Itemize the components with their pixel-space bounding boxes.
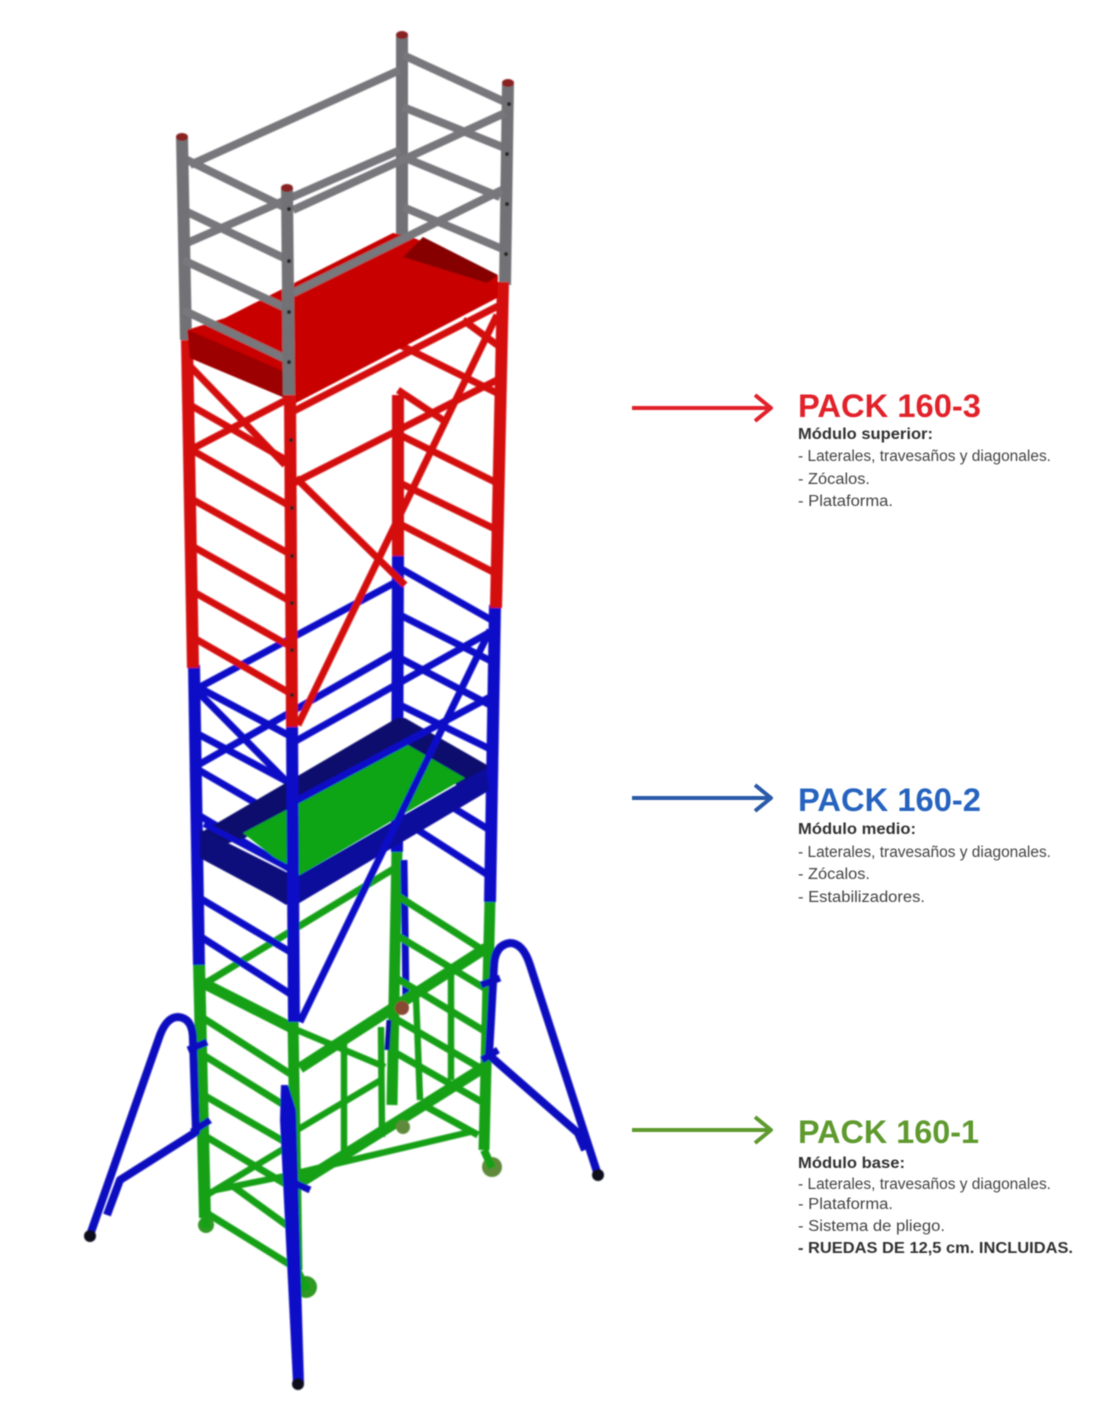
- red left rungs: [190, 405, 288, 692]
- green base module: [198, 850, 502, 1298]
- platform silhouette: [187, 233, 498, 404]
- blue back rails: [198, 581, 398, 765]
- green right post: [484, 900, 490, 1150]
- arrow: green: [632, 1117, 771, 1143]
- blue left post: [194, 665, 199, 965]
- description: [798, 426, 1051, 510]
- blue outrigger: right: [489, 943, 598, 1175]
- description: - Plataforma.: [798, 493, 893, 510]
- description: Módulo medio:: [798, 821, 916, 838]
- red X diagonals: [190, 366, 405, 585]
- heading: PACK 160-3: [798, 388, 981, 424]
- green floor: [243, 745, 465, 876]
- description: - Estabilizadores.: [798, 889, 925, 906]
- heading: PACK 160-1: [798, 1114, 979, 1150]
- green left post: [199, 962, 205, 1218]
- outrigger feet: [84, 1169, 604, 1390]
- red right face rungs: [398, 320, 500, 573]
- front left wall: [200, 829, 288, 905]
- arrow: red: [632, 395, 771, 421]
- wheels: [198, 1001, 502, 1298]
- green folding verticals: [297, 970, 451, 1153]
- callout: PACK 160-3: [632, 388, 1051, 510]
- blue outrigger: front: [280, 1085, 304, 1383]
- green front post: [293, 1020, 297, 1270]
- callout: PACK 160-2: [632, 782, 1051, 906]
- description: - Zócalos.: [798, 866, 870, 883]
- blue long diagonal: [300, 630, 490, 1022]
- green upper long rail: [204, 868, 395, 984]
- blue outrigger: left: [90, 1017, 196, 1235]
- red left post: [187, 340, 193, 668]
- description: - Sistema de pliego.: [798, 1218, 945, 1235]
- blue platform: [200, 718, 490, 905]
- blue back post: [397, 553, 398, 852]
- post caps: [176, 31, 514, 192]
- description: Módulo base:: [798, 1155, 905, 1172]
- front left wall: [188, 330, 285, 398]
- arrow: blue: [632, 785, 771, 811]
- blue front long rails: [294, 631, 492, 802]
- description: - Zócalos.: [798, 471, 870, 488]
- description: - Laterales, travesaños y diagonales.: [798, 844, 1051, 861]
- red right post: [496, 282, 503, 608]
- heading: PACK 160-2: [798, 782, 981, 818]
- description: - Laterales, travesaños y diagonales.: [798, 448, 1051, 465]
- blue right face rungs: [398, 567, 495, 875]
- blue brace behind green post: [404, 860, 406, 1000]
- green back post: [392, 850, 397, 1105]
- red long rails: [292, 305, 500, 484]
- front right wall: [296, 768, 490, 905]
- blue right post: [490, 605, 495, 902]
- green thick rails: [203, 948, 486, 1182]
- red platform: [187, 233, 498, 404]
- post holes: [289, 104, 509, 695]
- description: [798, 1155, 1073, 1257]
- back walls: [200, 718, 487, 845]
- green diagonals: [207, 1080, 470, 1195]
- scaffold tower illustration: [84, 31, 604, 1390]
- description: [798, 821, 1051, 906]
- blue left rungs: [196, 686, 292, 995]
- description: - Plataforma.: [798, 1196, 893, 1213]
- blue front post: [292, 725, 294, 1022]
- gray guardrail back: [182, 35, 508, 340]
- blue middle module: [194, 553, 495, 1022]
- red back post: [392, 395, 404, 556]
- back right wall: [403, 237, 498, 283]
- red front post: [290, 393, 292, 727]
- gray guardrail front: [176, 31, 514, 695]
- stabilizer clamps: [188, 978, 500, 1190]
- callout: PACK 160-1: [632, 1114, 1073, 1257]
- green left rungs: [200, 1016, 292, 1266]
- description: Módulo superior:: [798, 426, 933, 443]
- description: - Laterales, travesaños y diagonales.: [798, 1176, 1051, 1193]
- red top module: [187, 233, 503, 727]
- green right face rungs: [396, 896, 486, 1135]
- blue rail at platform: [204, 824, 288, 868]
- description: - RUEDAS DE 12,5 cm. INCLUIDAS.: [798, 1240, 1073, 1257]
- red long diagonal: [298, 315, 497, 725]
